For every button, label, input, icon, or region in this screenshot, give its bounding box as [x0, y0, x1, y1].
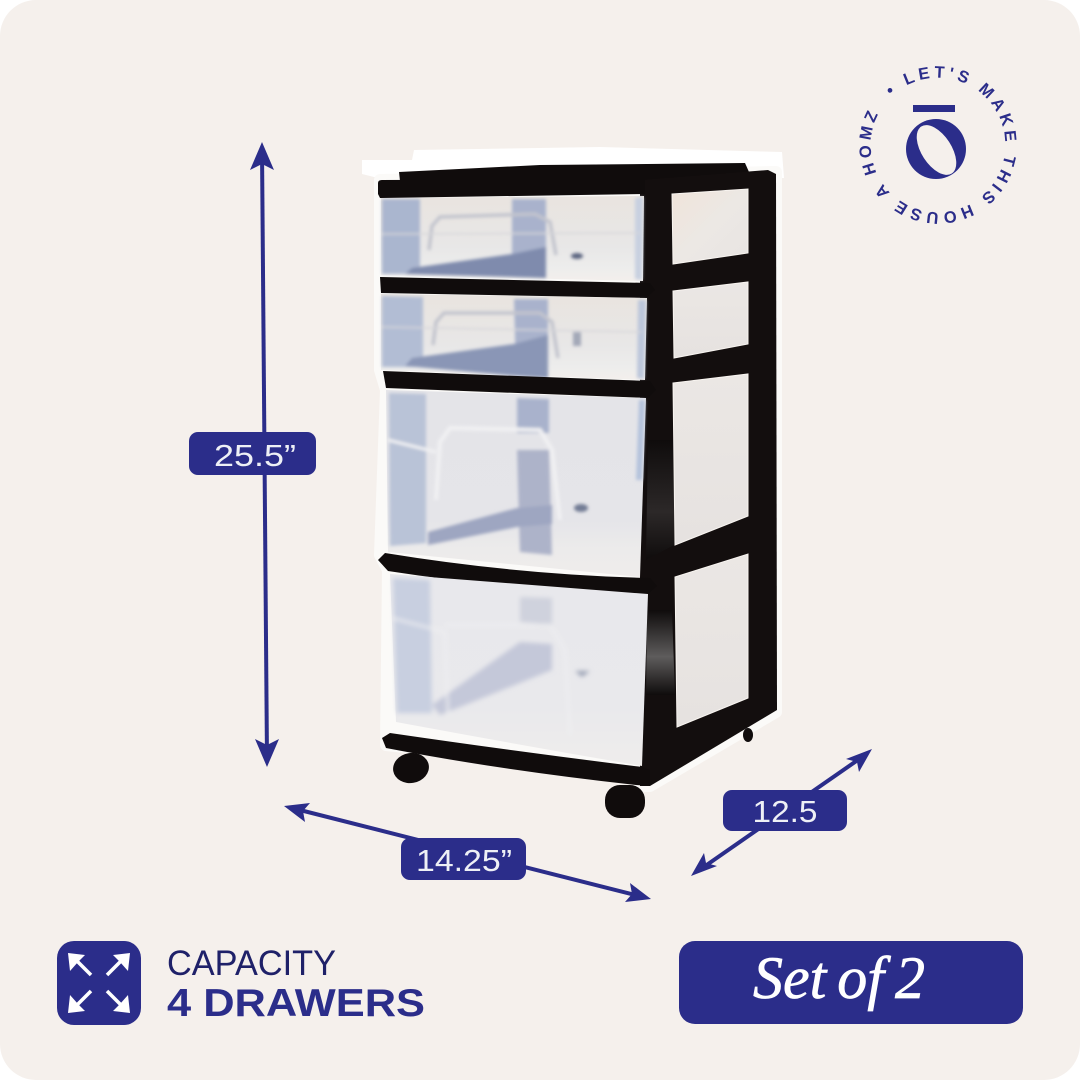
side panel 1	[672, 189, 748, 264]
bar 4	[378, 553, 657, 594]
drawer 3	[386, 390, 646, 577]
height arrow	[250, 142, 279, 767]
depth label	[723, 790, 847, 831]
width label: 14.25”	[416, 843, 512, 878]
set of 2 button	[679, 941, 1023, 1024]
bar 2	[380, 277, 655, 298]
width label	[401, 838, 526, 880]
drawer 2	[381, 294, 647, 380]
side panel 3	[673, 374, 748, 545]
front column highlights	[646, 440, 674, 560]
bottom bar	[382, 733, 650, 786]
height label: 25.5”	[214, 438, 296, 473]
wheel front	[605, 785, 645, 818]
wheel left	[391, 750, 431, 786]
capacity icon	[57, 941, 141, 1025]
side panel 4	[675, 554, 748, 727]
drawer 4	[390, 574, 648, 766]
product photo: drawer cart	[362, 147, 784, 818]
depth label: 12.5	[752, 794, 818, 829]
top front bar	[378, 179, 645, 198]
circular slogan	[871, 78, 1005, 212]
white photo halo	[362, 147, 784, 178]
capacity text: CAPACITY	[167, 944, 336, 983]
width arrow	[284, 803, 651, 902]
wheel rear	[743, 728, 753, 742]
set of 2 button: Set of 2	[753, 945, 925, 1011]
side panel 2	[673, 282, 748, 358]
depth arrow	[691, 749, 872, 876]
capacity text: 4 DRAWERS	[167, 982, 425, 1025]
side frame	[640, 170, 777, 786]
capacity text	[167, 944, 425, 1025]
brand logo mark	[906, 105, 966, 182]
lid	[399, 163, 749, 182]
drawer 1	[381, 196, 644, 281]
bar 3	[383, 371, 656, 398]
brand badge: • LET'S MAKE THIS HOUSE A HOMZ	[859, 66, 1016, 224]
height label	[189, 432, 316, 475]
